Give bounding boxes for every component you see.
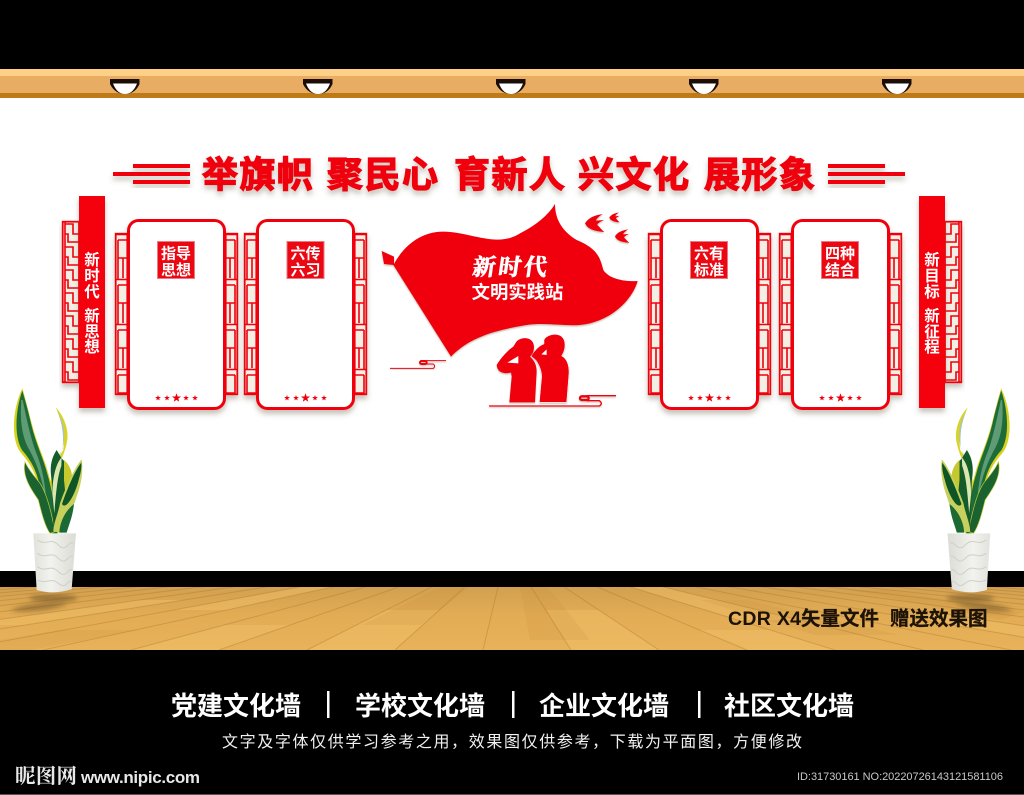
icon: ceiling lamp 4 [689, 79, 718, 94]
panel: card 四种结合 [780, 220, 901, 408]
flag text: 新时代 [471, 248, 552, 282]
separator [512, 691, 514, 718]
card frame [649, 220, 770, 408]
tag: 四种 [825, 242, 855, 264]
tag: 标准 [694, 259, 724, 280]
flag subtitle: 文明实践站 [472, 278, 563, 304]
icon: saluting figures [497, 334, 569, 402]
left title rules [113, 164, 190, 184]
tag: 指导 [161, 242, 191, 264]
card frame [780, 220, 901, 408]
icon: ceiling lamp 5 [882, 79, 912, 94]
category 企业文化墙: 企业文化墙 [539, 686, 669, 723]
tag [287, 242, 324, 280]
tag [690, 242, 728, 280]
cloud scroll left [390, 361, 446, 368]
red flag [382, 204, 638, 357]
right title rules [828, 164, 905, 184]
separator [327, 691, 330, 718]
title text: 举旗帜 [202, 146, 315, 198]
category 社区文化墙: 社区文化墙 [724, 686, 854, 723]
tag: 六传 [290, 242, 321, 264]
title text: 育新人 [454, 146, 567, 198]
footer headline categories [171, 686, 854, 723]
card frame [245, 220, 366, 408]
icon: ceiling lamp 3 [496, 79, 526, 94]
icon: swallows [585, 213, 629, 243]
title text: 展形象 [704, 146, 817, 198]
watermark logo: 昵图网 [15, 759, 77, 789]
panel: card 指导思想 [116, 220, 237, 408]
title text: 兴文化 [578, 146, 691, 198]
panel: center flag emblem [382, 204, 638, 406]
tag [158, 242, 194, 280]
red banner [919, 196, 945, 408]
tag: 六有 [694, 242, 724, 264]
bottom edge line [0, 794, 1024, 795]
black baseboard [0, 571, 1024, 587]
red banner [79, 196, 105, 408]
white wall [0, 98, 1024, 571]
separator [698, 691, 700, 718]
panel: card 六传六习 [245, 220, 366, 408]
wood floor [0, 587, 1024, 650]
bottom black band [0, 650, 1024, 795]
title text: 聚民心 [327, 146, 440, 198]
top black band [0, 0, 1024, 69]
title with side rules [113, 146, 905, 198]
banner text: 新目标新征程 [924, 248, 940, 357]
cloud scroll right [489, 396, 616, 406]
tag: 思想 [161, 259, 191, 280]
tag: 六习 [290, 259, 321, 280]
floor caption [728, 602, 988, 631]
card frame [116, 220, 237, 408]
lattice behind left banner [63, 222, 79, 382]
floor caption: 矢量文件 [801, 602, 879, 631]
tag: 结合 [825, 259, 855, 280]
watermark logo [15, 759, 200, 789]
category 党建文化墙: 党建文化墙 [171, 686, 301, 723]
tag [822, 242, 858, 280]
icon: potted plant right [941, 388, 1014, 612]
icon: ceiling lamp 1 [110, 79, 140, 94]
icon: potted plant left [10, 388, 82, 612]
wooden ceiling beam with lamps [0, 69, 1024, 98]
floor caption: 赠送效果图 [890, 602, 988, 631]
category 学校文化墙: 学校文化墙 [355, 686, 485, 723]
watermark logo: www.nipic.com [80, 768, 200, 787]
banner text: 新时代新思想 [84, 248, 100, 357]
panel: right banner [919, 196, 961, 408]
lattice behind right banner [945, 222, 961, 382]
icon: ceiling lamp 2 [303, 79, 332, 94]
panel: left banner [63, 196, 105, 408]
panel: card 六有标准 [649, 220, 770, 408]
image id: ID:31730161 NO:20220726143121581106 [797, 771, 1003, 783]
footer note: 文字及字体仅供学习参考之用，效果图仅供参考，下载为平面图，方便修改 [222, 728, 802, 752]
floor caption: CDR X4 [728, 608, 801, 630]
